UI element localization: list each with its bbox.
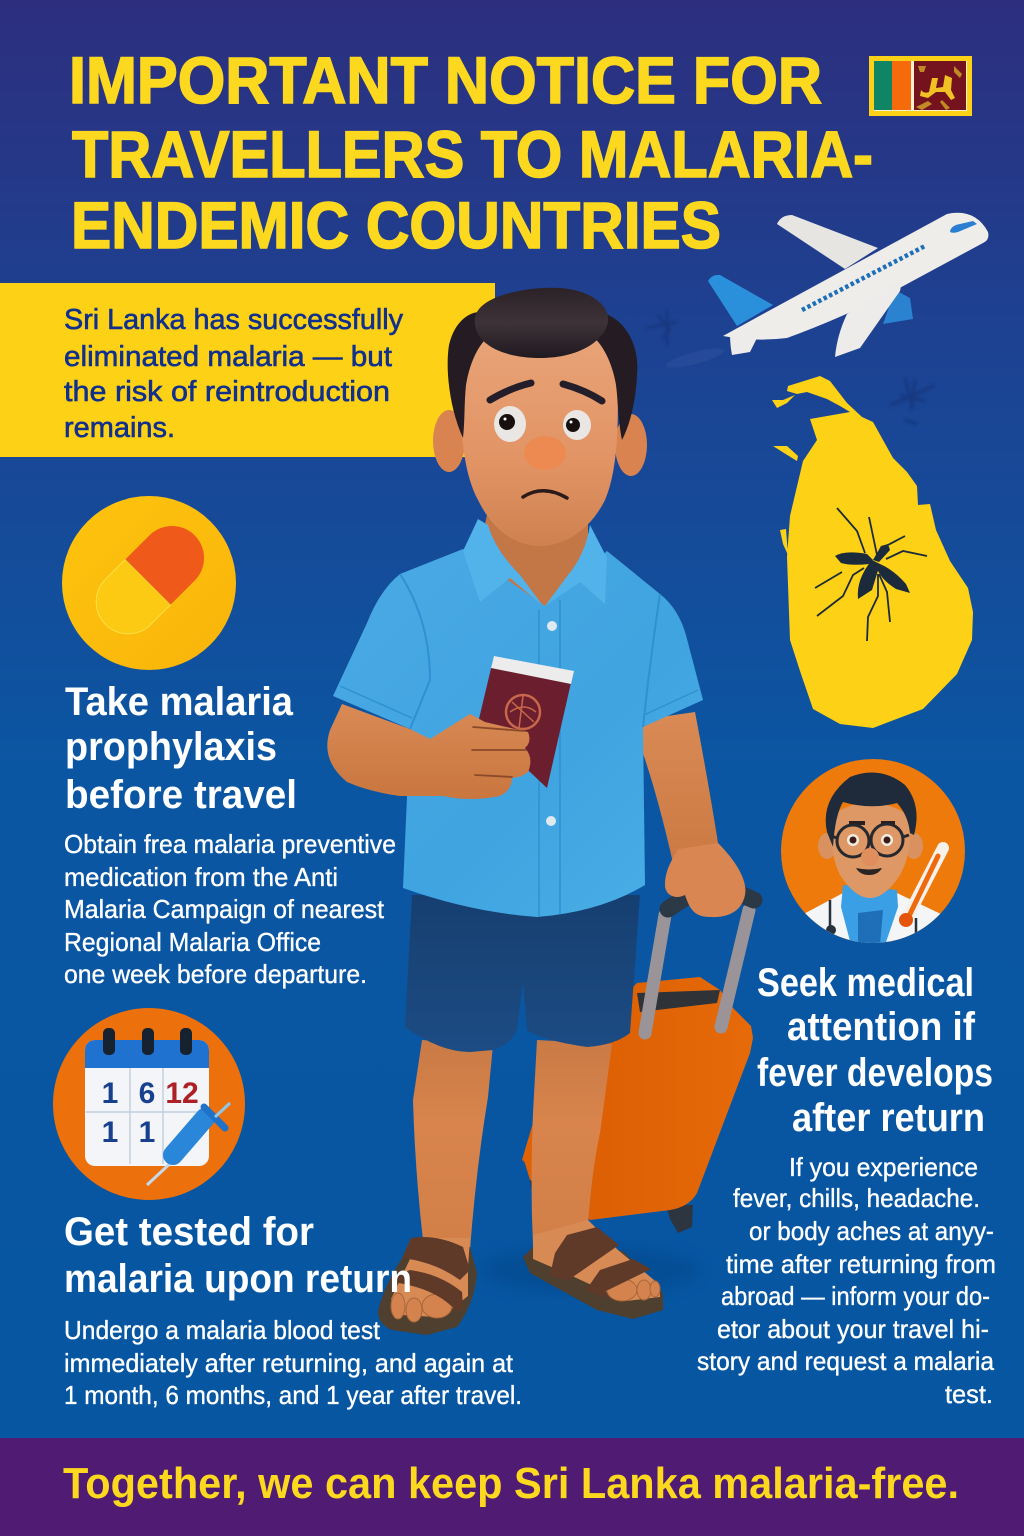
heading: medical attention: Seek medical [757,961,974,1005]
heading: tested: malaria upon return [64,1257,412,1301]
text: prophylaxis details: medication from the Anti [64,862,338,892]
text: tested details [64,1315,522,1410]
shirt and tie [841,885,898,945]
text: medical details: If you experience [789,1152,978,1182]
icon: calendar and syringe: 12 [165,1077,199,1110]
left leg [413,1040,493,1250]
text: prophylaxis details: Regional Malaria Office [64,927,321,957]
hair [448,288,637,440]
shirt [333,549,703,917]
smoke [664,344,726,372]
text: prophylaxis details: Obtain frea malaria preventive [64,829,396,859]
heading: prophylaxis: Take malaria [65,680,294,724]
icon: Sri Lanka flag [869,56,972,116]
icon: airplane [664,213,988,372]
text: prophylaxis details [64,829,396,989]
mouth [523,491,567,498]
title [69,43,873,262]
passport [478,656,574,788]
map: Sri Lanka [772,376,973,728]
buttons [547,621,557,631]
text: medical details: time after returning from [726,1249,996,1279]
icon: calendar and syringe: 1 [102,1116,118,1149]
footer band: Together, we can keep Sri Lanka malaria-free. [63,1459,959,1508]
text: prophylaxis details: Malaria Campaign of nearest [64,894,385,924]
thermometer [906,848,943,920]
heading: medical attention: attention if [787,1005,976,1049]
coat [805,893,940,943]
title: IMPORTANT NOTICE FOR [69,43,822,117]
right arm [640,712,745,895]
icon: faint mosquito left of plane [647,310,677,346]
icon: doctor [781,759,965,950]
footer band [0,1438,1024,1536]
icon: calendar and syringe [53,1008,245,1200]
neck [478,510,588,608]
callout band: remains. [64,412,175,444]
left sandal [378,1237,477,1335]
brows [849,821,895,825]
icon: calendar and syringe: 6 [139,1077,155,1110]
right sandal [523,1220,663,1319]
strap [637,990,720,1012]
text: tested details: 1 month, 6 months, and 1 year after travel. [64,1380,522,1410]
text: medical details [697,1152,996,1409]
text: tested details: Undergo a malaria blood test [64,1315,381,1345]
text: medical details: story and request a malaria [697,1346,995,1376]
text: medical details: or body aches at anyy- [749,1216,994,1246]
collar [463,519,543,606]
heading: prophylaxis: before travel [65,773,297,817]
icon: suitcase [522,892,754,1233]
brows [490,383,602,401]
left arm and hand [327,704,530,799]
eyes [847,834,859,846]
text: medical details: test. [945,1379,993,1409]
text: tested details: immediately after returning, and again at [64,1348,514,1378]
callout band [0,283,495,457]
shadow under suitcase and feet [480,1245,700,1295]
nose [524,436,566,470]
wheels [666,1205,693,1233]
heading: tested: Get tested for [64,1210,314,1254]
heading: tested [64,1210,412,1301]
callout band: the risk of reintroduction [64,376,390,408]
poles [645,915,665,1033]
heading: medical attention: after return [792,1096,985,1140]
title: ENDEMIC COUNTRIES [71,188,721,262]
hair [826,772,917,847]
eyes [494,406,591,442]
text: medical details: fever, chills, headache. [733,1183,980,1213]
callout band: Sri Lanka has successfully [64,304,403,336]
nose [861,848,879,866]
heading: prophylaxis [65,680,297,817]
figure: worried traveller [327,288,745,1335]
title: TRAVELLERS TO MALARIA- [72,117,873,191]
shorts [405,895,640,1052]
icon: calendar and syringe: 1 [102,1077,118,1110]
case body [522,977,753,1220]
icon: capsule [62,496,236,670]
ears [433,410,465,472]
icon: faint mosquito above map [890,378,935,424]
face [461,329,618,546]
text: medical details: etor about your travel hi- [717,1314,989,1344]
hand on suitcase [665,843,745,917]
text: medical details: abroad — inform your do- [721,1281,990,1311]
sleeve shading [400,574,430,729]
heading: prophylaxis: prophylaxis [65,725,277,769]
mouth [856,868,882,875]
text: prophylaxis details: one week before departure. [64,959,367,989]
handle [668,893,692,909]
right leg [532,1040,612,1245]
placket [539,600,560,917]
face [831,802,910,898]
heading: medical attention [757,961,993,1140]
icon: calendar and syringe: 1 [139,1116,155,1149]
icon: mosquito on map [815,508,927,641]
callout band: eliminated malaria — but [64,341,392,373]
glasses [831,824,909,857]
ears [818,833,836,859]
